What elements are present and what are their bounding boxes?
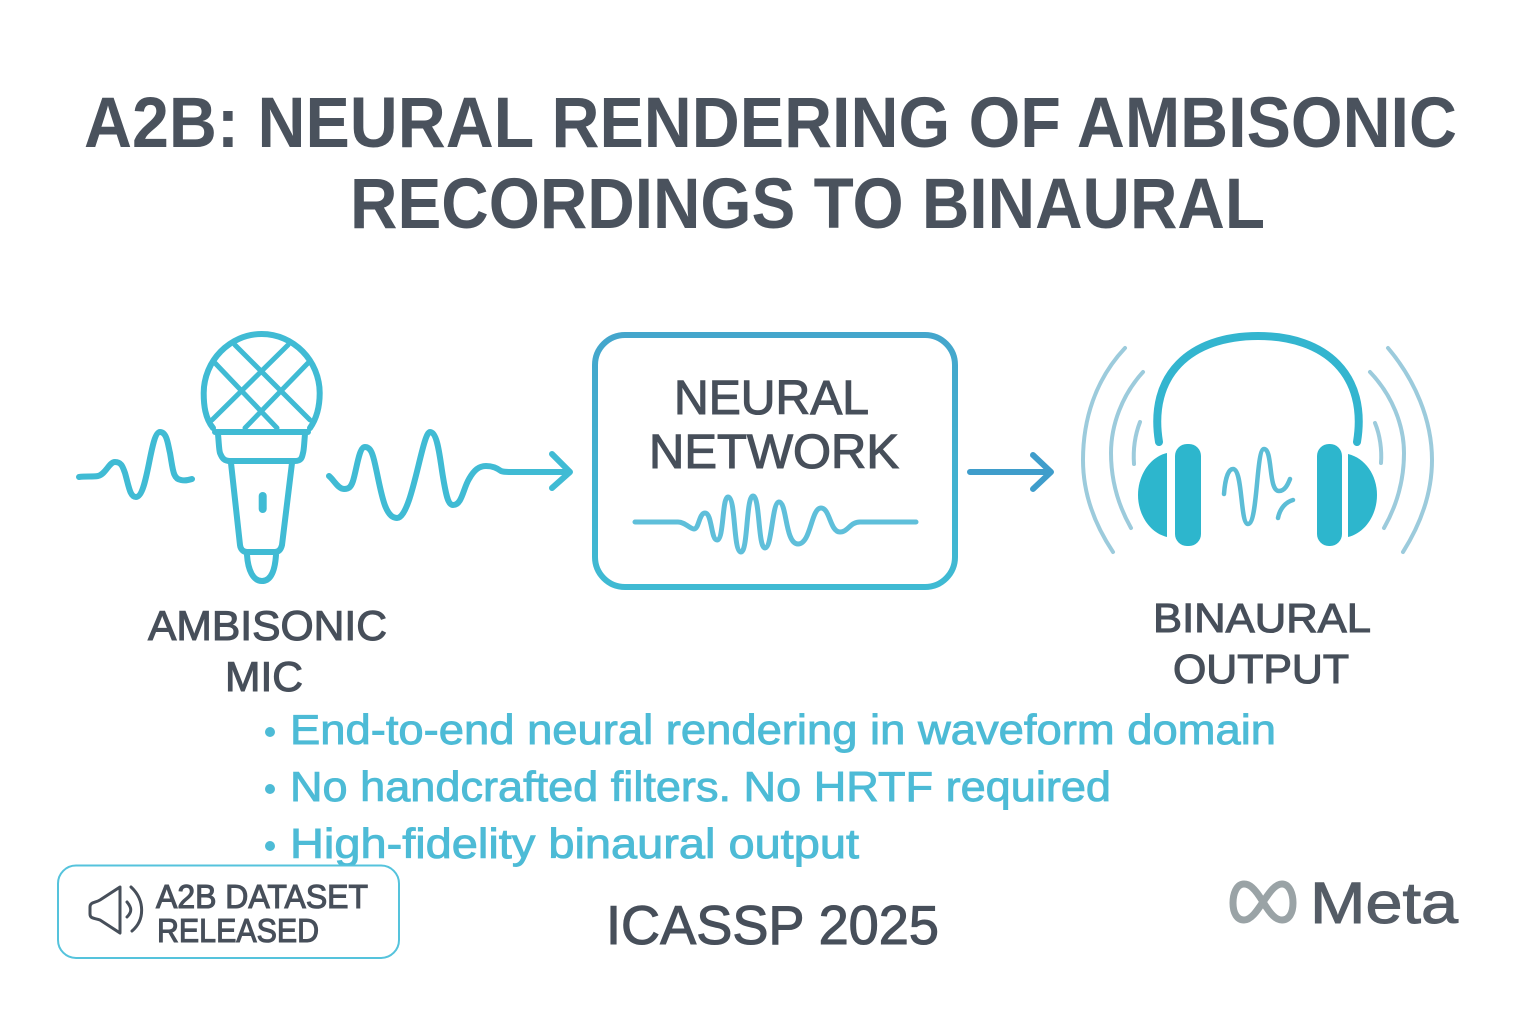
panel heading — [649, 372, 899, 479]
bullet list: High-fidelity binaural output — [290, 820, 859, 867]
icon: speaker — [90, 887, 142, 933]
right ear cup — [1317, 444, 1377, 546]
label: ambisonic mic: AMBISONIC — [148, 602, 387, 649]
icon: headphones — [1083, 336, 1432, 552]
wordmark: Meta — [1310, 871, 1459, 936]
title: RECORDINGS TO BINAURAL — [350, 165, 1265, 244]
headband — [1157, 336, 1359, 442]
panel: neural network — [595, 335, 955, 587]
bullet list: No handcrafted filters. No HRTF required — [290, 763, 1111, 810]
sound arcs — [1083, 348, 1432, 552]
microphone slot — [259, 496, 267, 509]
waveform between cups — [1224, 449, 1293, 524]
icon: microphone with input waveform — [79, 334, 570, 581]
input waveform — [79, 432, 192, 497]
microphone base — [247, 555, 276, 581]
label: binaural output: BINAURAL — [1153, 595, 1371, 641]
title — [84, 84, 1457, 244]
panel heading: NETWORK — [649, 426, 899, 479]
label: binaural output — [1153, 595, 1371, 692]
badge text: A2B DATASET — [156, 878, 368, 915]
label: ambisonic mic — [148, 602, 387, 700]
arrow: network to output — [970, 455, 1051, 489]
bullet list — [265, 706, 1276, 867]
label: ambisonic mic: MIC — [225, 653, 303, 700]
waveform in panel — [635, 496, 916, 552]
left ear cup — [1138, 444, 1201, 546]
arrow head — [552, 454, 570, 488]
panel outline — [595, 335, 955, 587]
microphone head — [204, 334, 320, 428]
badge: dataset released — [58, 866, 399, 958]
conference label: ICASSP 2025 — [606, 894, 939, 956]
panel heading: NEURAL — [674, 372, 869, 425]
bullet list: End-to-end neural rendering in waveform domain — [290, 706, 1276, 753]
microphone collar — [215, 432, 308, 461]
badge text — [156, 878, 368, 949]
label: binaural output: OUTPUT — [1173, 646, 1349, 692]
meta logo — [1233, 871, 1459, 936]
badge text: RELEASED — [157, 912, 319, 949]
output waveform — [329, 432, 568, 518]
icon: infinity mark — [1233, 884, 1293, 920]
title: A2B: NEURAL RENDERING OF AMBISONIC — [84, 84, 1457, 163]
microphone handle — [231, 463, 292, 552]
